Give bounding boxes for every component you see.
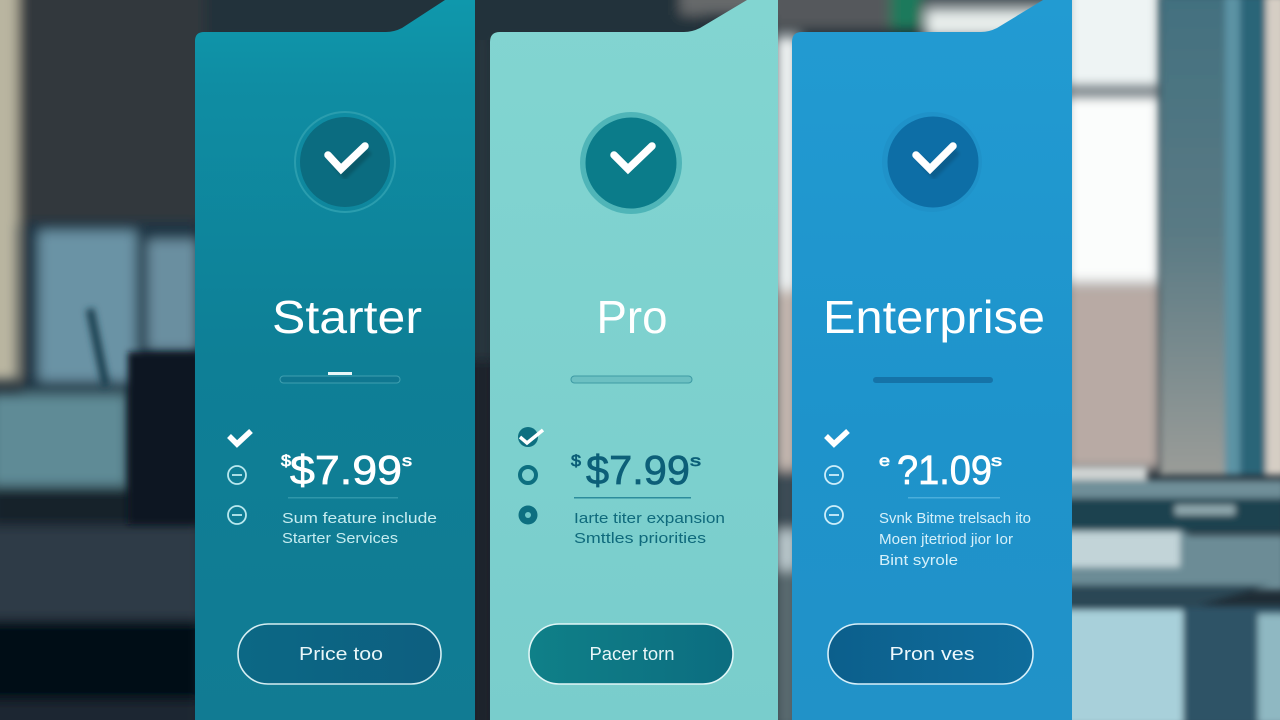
button: Price too [299,644,383,664]
price: e [879,453,890,470]
price rule [908,497,1000,498]
button [828,624,1033,684]
panel: Pro plan [490,0,778,720]
price: s [402,453,412,470]
button [238,624,441,684]
description [282,510,437,547]
price: s [991,453,1002,470]
icon: main check badge [295,112,395,212]
description: Bint syrole [879,552,958,569]
description [574,510,725,547]
description: Starter Services [282,530,398,547]
description: Sum feature include [282,510,437,527]
panel: Enterprise plan [792,0,1072,720]
icon: main check badge [580,112,682,214]
divider [280,372,400,383]
description: Smttles priorities [574,530,706,547]
description: Moen jtetriod jior Ior [879,531,1013,548]
button: Pacer torn [590,644,674,664]
card shape [792,0,1072,720]
price: ?1.09 [897,447,992,493]
description: Svnk Bitme trelsach ito [879,510,1031,527]
price: $ [281,453,291,470]
price: $7.99 [290,447,402,493]
panel: Starter plan [195,0,475,720]
heading: Pro [596,291,668,343]
price: s [690,453,701,470]
heading: Enterprise [823,291,1045,343]
button: Pron ves [890,644,974,664]
feature icons [825,431,848,524]
price: $7.99 [586,447,690,493]
button [529,624,733,684]
card shape [490,0,778,720]
feature icons [228,431,251,524]
icon: main check badge [882,112,982,212]
feature icons [518,427,543,524]
description [879,510,1031,569]
price: $ [571,453,581,470]
divider [873,377,993,383]
divider [571,376,692,383]
card shape [195,0,475,720]
description: Iarte titer expansion [574,510,725,527]
price rule [288,497,398,498]
price rule [574,497,691,498]
heading: Starter [272,291,422,343]
